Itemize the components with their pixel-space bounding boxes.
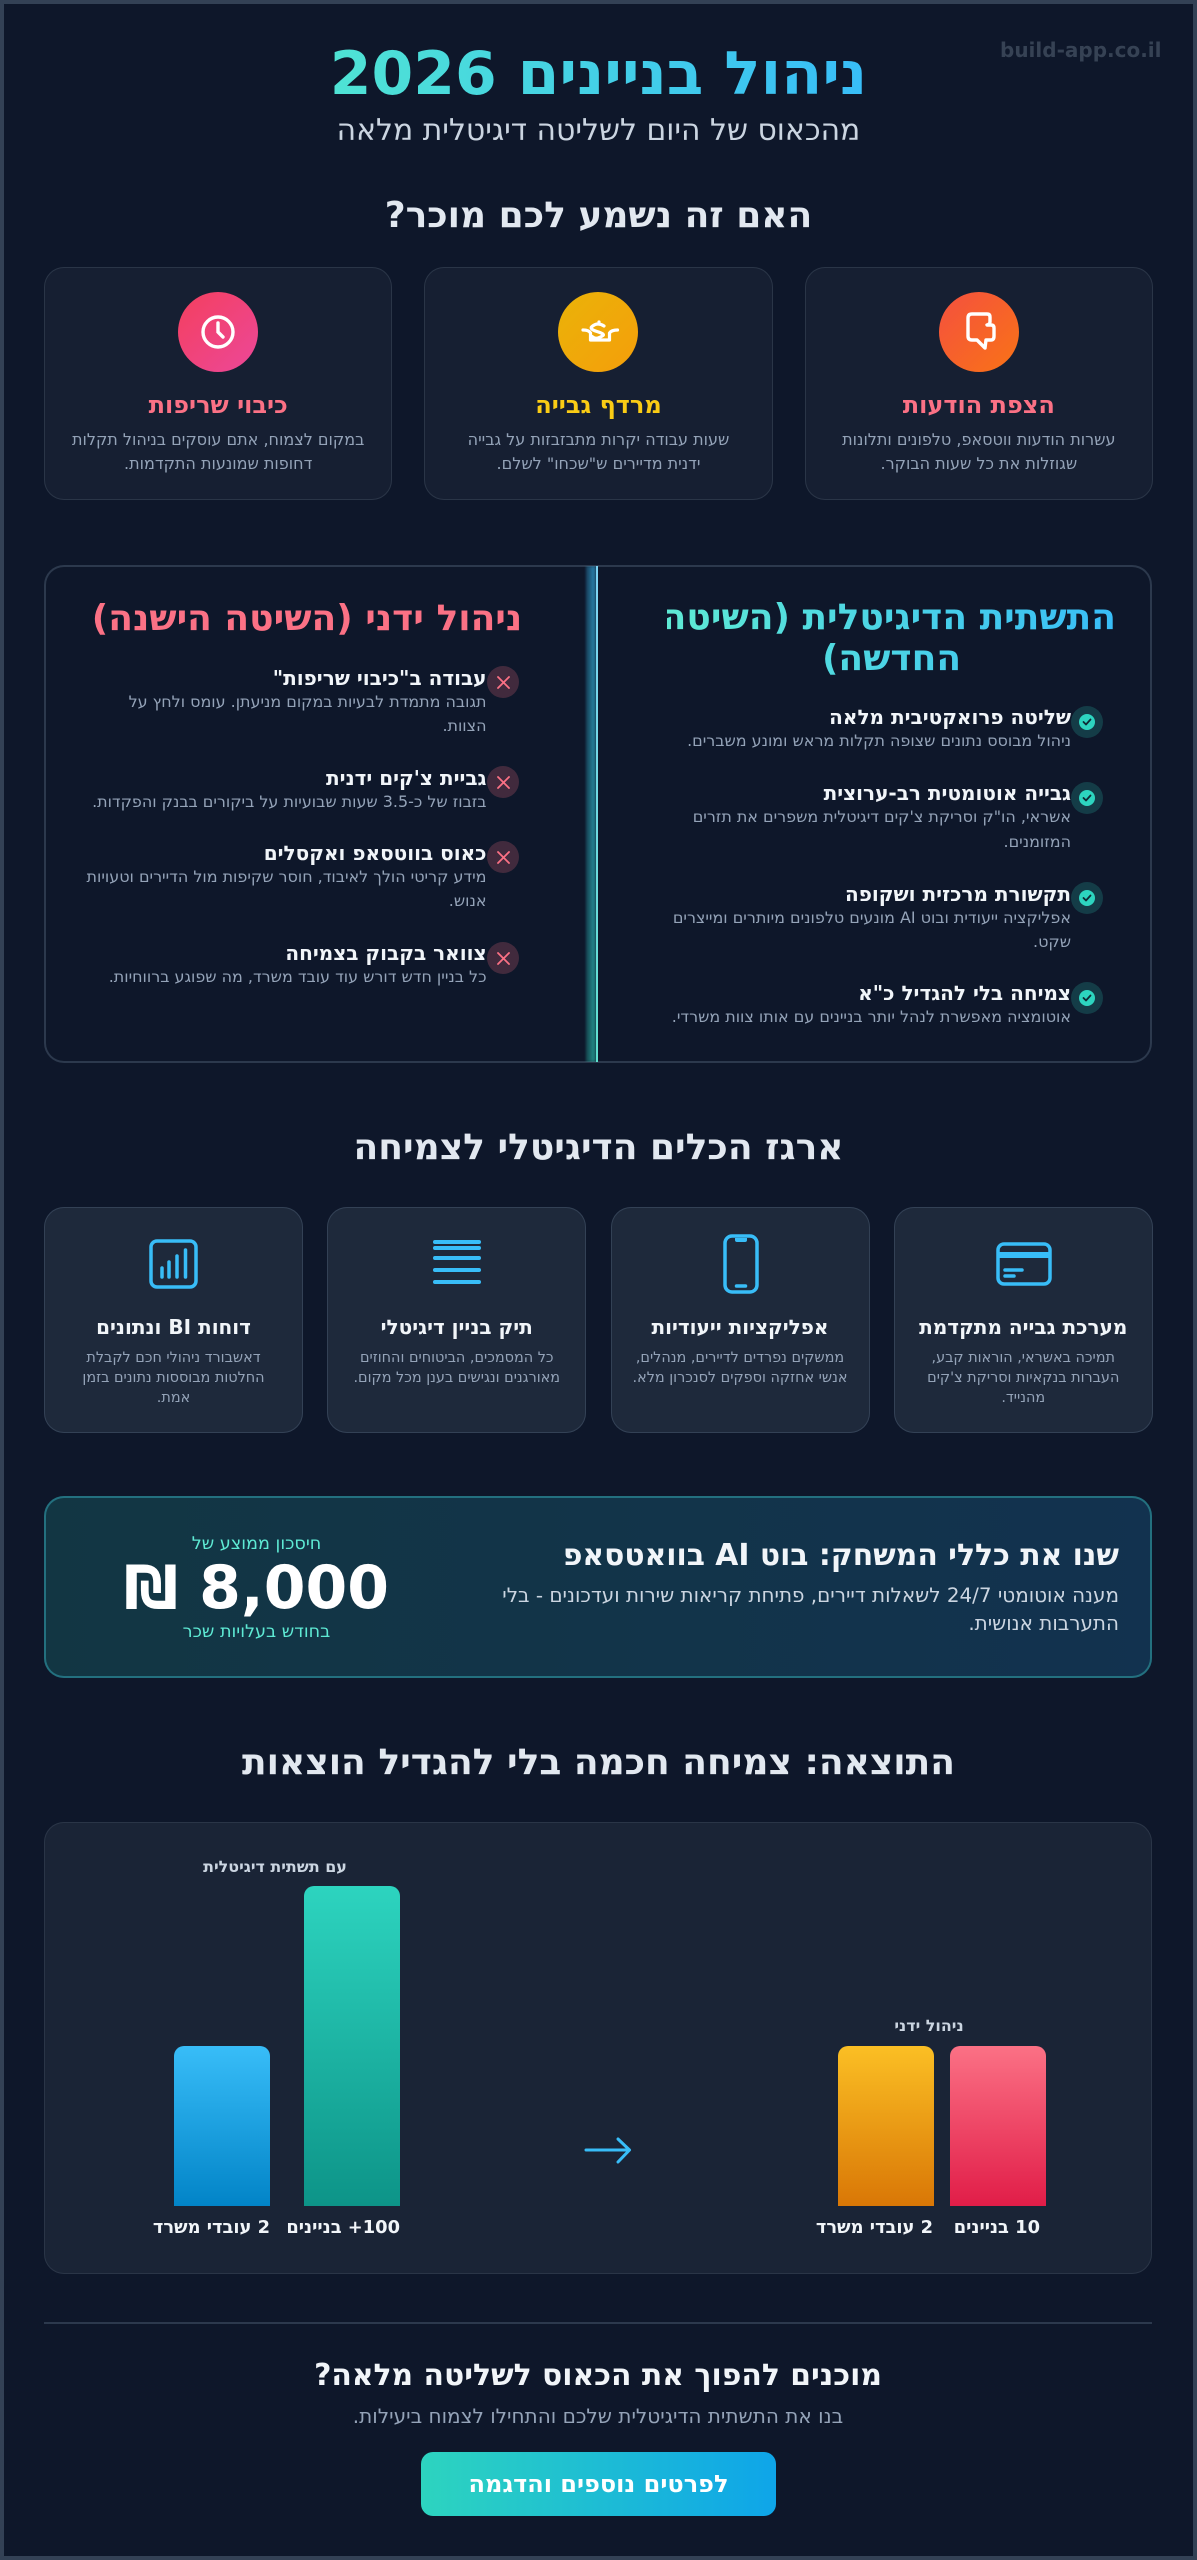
callout text <box>502 1584 1119 1635</box>
footer text: בנו את התשתית הדיגיטלית שלכם והתחילו לצמוח ביעילות. <box>353 2404 843 2428</box>
card text <box>927 1350 1119 1406</box>
center divider <box>584 566 598 1062</box>
card text <box>842 430 1115 473</box>
chart group: digital <box>153 1856 400 2238</box>
bar: buildings manual <box>950 2046 1046 2206</box>
item text <box>693 807 1071 851</box>
card text: דחופות שמונעות התקדמות. <box>124 454 312 473</box>
card text: שגוזלות את כל שעות הבוקר. <box>880 454 1077 473</box>
icon: x <box>486 841 518 873</box>
card text: החלטות מבוססות נתונים בזמן <box>82 1370 265 1386</box>
icon: check <box>1071 982 1103 1014</box>
icon: check <box>1071 782 1103 814</box>
item text: אשראי, הו"ק וסריקת צ'קים דיגיטלית משפרים את תזרים <box>693 807 1071 826</box>
card title: אפליקציות ייעודיות <box>651 1314 828 1338</box>
subtitle: מהכאוס של היום לשליטה דיגיטלית מלאה <box>337 113 860 148</box>
item text: ניהול מבוסס נתונים שצופה תקלות מראש ומונע משברים. <box>687 731 1071 750</box>
card text: ידנית מדיירים ש"שכחו" לשלם. <box>497 454 700 473</box>
card title: דוחות BI ונתונים <box>96 1314 251 1338</box>
item title: תקשורת מרכזית ושקופה <box>845 882 1071 906</box>
icon: phone <box>723 1234 759 1294</box>
icon: clock <box>178 292 258 372</box>
callout text: התערבות אנושית. <box>968 1612 1119 1635</box>
item text: אוטומציה מאפשרת לנהל יותר בניינים עם אותו צוות משרדי. <box>672 1007 1071 1026</box>
caption: עם תשתית דיגיטלית <box>203 1856 347 1876</box>
button: לפרטים נוספים והדגמה <box>469 2470 728 2498</box>
icon: bar chart <box>149 1239 198 1289</box>
label: 10 בניינים <box>954 2217 1040 2238</box>
item text: אנוש. <box>449 891 486 910</box>
card text: שעות עבודה יקרות מתבזבזות על גבייה <box>468 430 729 449</box>
item text <box>129 692 486 735</box>
icon: x <box>486 942 518 974</box>
card text: כל המסמכים, הביטוחים והחוזים <box>360 1350 554 1366</box>
panel: firefighting <box>44 267 392 500</box>
panel: message flood <box>805 267 1153 500</box>
icon: x <box>486 666 518 698</box>
item title: שליטה פרואקטיבית מלאה <box>829 705 1071 729</box>
card text: עשרות הודעות ווטסאפ, טלפונים ותלונות <box>842 430 1115 449</box>
arrow <box>584 2137 632 2164</box>
bar: buildings digital <box>304 1886 400 2206</box>
item: growth <box>672 981 1103 1026</box>
card title: מרדף גבייה <box>535 391 662 419</box>
heading: result: התוצאה: צמיחה חכמה בלי להגדיל הוצאות <box>242 1742 955 1783</box>
button <box>421 2452 776 2516</box>
item title: גביית צ'קים ידנית <box>326 766 486 790</box>
item: central communication <box>673 882 1103 951</box>
card text <box>633 1350 847 1386</box>
item: automatic collection <box>693 781 1103 851</box>
card text <box>72 430 364 473</box>
bar: office staff manual <box>838 2046 934 2206</box>
panel: BI reports <box>44 1207 303 1433</box>
footer heading: מוכנים להפוך את הכאוס לשליטה מלאה? <box>314 2358 882 2393</box>
icon: message bubble <box>939 292 1019 372</box>
label: 100+ בניינים <box>286 2217 400 2238</box>
item text: מידע קריטי הולך לאיבוד, חוסר שקיפות מול הדיירים וטעויות <box>87 867 486 886</box>
item title: גבייה אוטומטית רב-ערוצית <box>824 781 1071 805</box>
card text <box>82 1350 265 1406</box>
panel: bar chart <box>44 1822 1152 2274</box>
callout text: מענה אוטומטי 24/7 לשאלות דיירים, פתיחת קריאות שירות ועדכונים - בלי <box>502 1584 1119 1607</box>
card text: אנשי אחזקה וספקים לסנכרון מלא. <box>633 1370 847 1386</box>
card text <box>353 1350 560 1386</box>
label: 2 עובדי משרד <box>816 2217 933 2238</box>
callout title: שנו את כללי המשחק: בוט AI בוואטסאפ <box>563 1538 1119 1573</box>
heading: old way: ניהול ידני (השיטה הישנה) <box>92 598 522 639</box>
heading: new way: התשתית הדיגיטלית (השיטה <box>662 597 1116 638</box>
item title: עבודה ב"כיבוי שריפות" <box>273 666 486 690</box>
item text: הצוות. <box>442 716 486 735</box>
footer section <box>44 2322 1152 2522</box>
card title: תיק בניין דיגיטלי <box>381 1314 533 1338</box>
item text: שקט. <box>1033 932 1071 951</box>
item text: המזומנים. <box>1004 832 1071 851</box>
item: firefighting <box>129 666 519 735</box>
card title: כיבוי שריפות <box>149 391 288 419</box>
icon: credit card <box>996 1242 1052 1286</box>
icon: check <box>1071 706 1103 738</box>
title: ניהול בניינים 2026 <box>330 39 867 109</box>
panel: comparison <box>44 565 1152 1063</box>
card text <box>468 430 729 473</box>
icon: money <box>558 292 638 372</box>
panel: dedicated apps <box>610 1207 870 1433</box>
stat label: חיסכון ממוצע של <box>192 1534 321 1554</box>
chart group: manual <box>816 2016 1046 2238</box>
card text: ממשקים נפרדים לדיירים, מנהלים, <box>636 1350 844 1366</box>
item: bottleneck <box>109 941 519 986</box>
item text: בזבוז של כ-3.5 שעות שבועיות על ביקורים בבנק והפקדות. <box>92 792 486 810</box>
item: proactive control <box>687 705 1103 750</box>
stat note: בחודש בעלויות שכר <box>183 1622 330 1642</box>
heading: pain points: האם זה נשמע לכם מוכר? <box>385 195 812 236</box>
icon: lines <box>433 1240 481 1284</box>
icon: check <box>1071 882 1103 914</box>
panel: digital building file <box>327 1207 586 1433</box>
bar: office staff digital <box>174 2046 270 2206</box>
card text: העברות בנקאיות וסריקת צ'קים <box>927 1370 1119 1386</box>
caption: ניהול ידני <box>894 2016 964 2035</box>
watermark: build-app.co.il <box>1000 38 1162 62</box>
item title: כאוס בווטסאפ ואקסלים <box>264 841 486 865</box>
card text: אמת. <box>157 1390 190 1406</box>
item title: צמיחה בלי להגדיל כ"א <box>858 981 1071 1005</box>
card text: מאורגנים ונגישים בענן מכל מקום. <box>353 1370 560 1386</box>
card text: דאשבורד ניהולי חכם לקבלת <box>86 1350 261 1366</box>
card title: מערכת גבייה מתקדמת <box>919 1314 1127 1338</box>
panel: AI bot callout <box>44 1496 1152 1678</box>
panel: collection system <box>894 1207 1153 1433</box>
label: 2 עובדי משרד <box>153 2217 270 2238</box>
heading: toolkit: ארגז הכלים הדיגיטלי לצמיחה <box>354 1127 843 1168</box>
item text: אפליקציה ייעודית ובוט AI מונעים טלפונים מיותרים ומייצרים <box>673 908 1071 926</box>
item text <box>86 867 486 910</box>
card text: במקום לצמוח, אתם עוסקים בניהול תקלות <box>72 430 364 449</box>
heading: new way: החדשה) <box>822 638 961 679</box>
item text: תגובה מתמדת לבעיות במקום מניעתן. עומס ולחץ על <box>129 692 486 710</box>
card text: תמיכה באשראי, הוראות קבע, <box>932 1350 1115 1366</box>
icon: x <box>486 766 518 798</box>
item text <box>673 908 1071 951</box>
item: chaos <box>86 841 519 910</box>
stat number: 8,000 ₪ <box>124 1553 389 1623</box>
heading: new way <box>667 597 1116 681</box>
card text: מהנייד. <box>1001 1390 1045 1406</box>
card title: הצפת הודעות <box>903 391 1055 419</box>
item: manual checks <box>92 766 519 810</box>
item text: כל בניין חדש דורש עוד עובד משרד, מה שפוגע ברווחיות. <box>109 967 486 986</box>
item title: צוואר בקבוק בצמיחה <box>285 941 486 965</box>
panel: collection chase <box>424 267 773 500</box>
stat: savings <box>124 1534 389 1642</box>
